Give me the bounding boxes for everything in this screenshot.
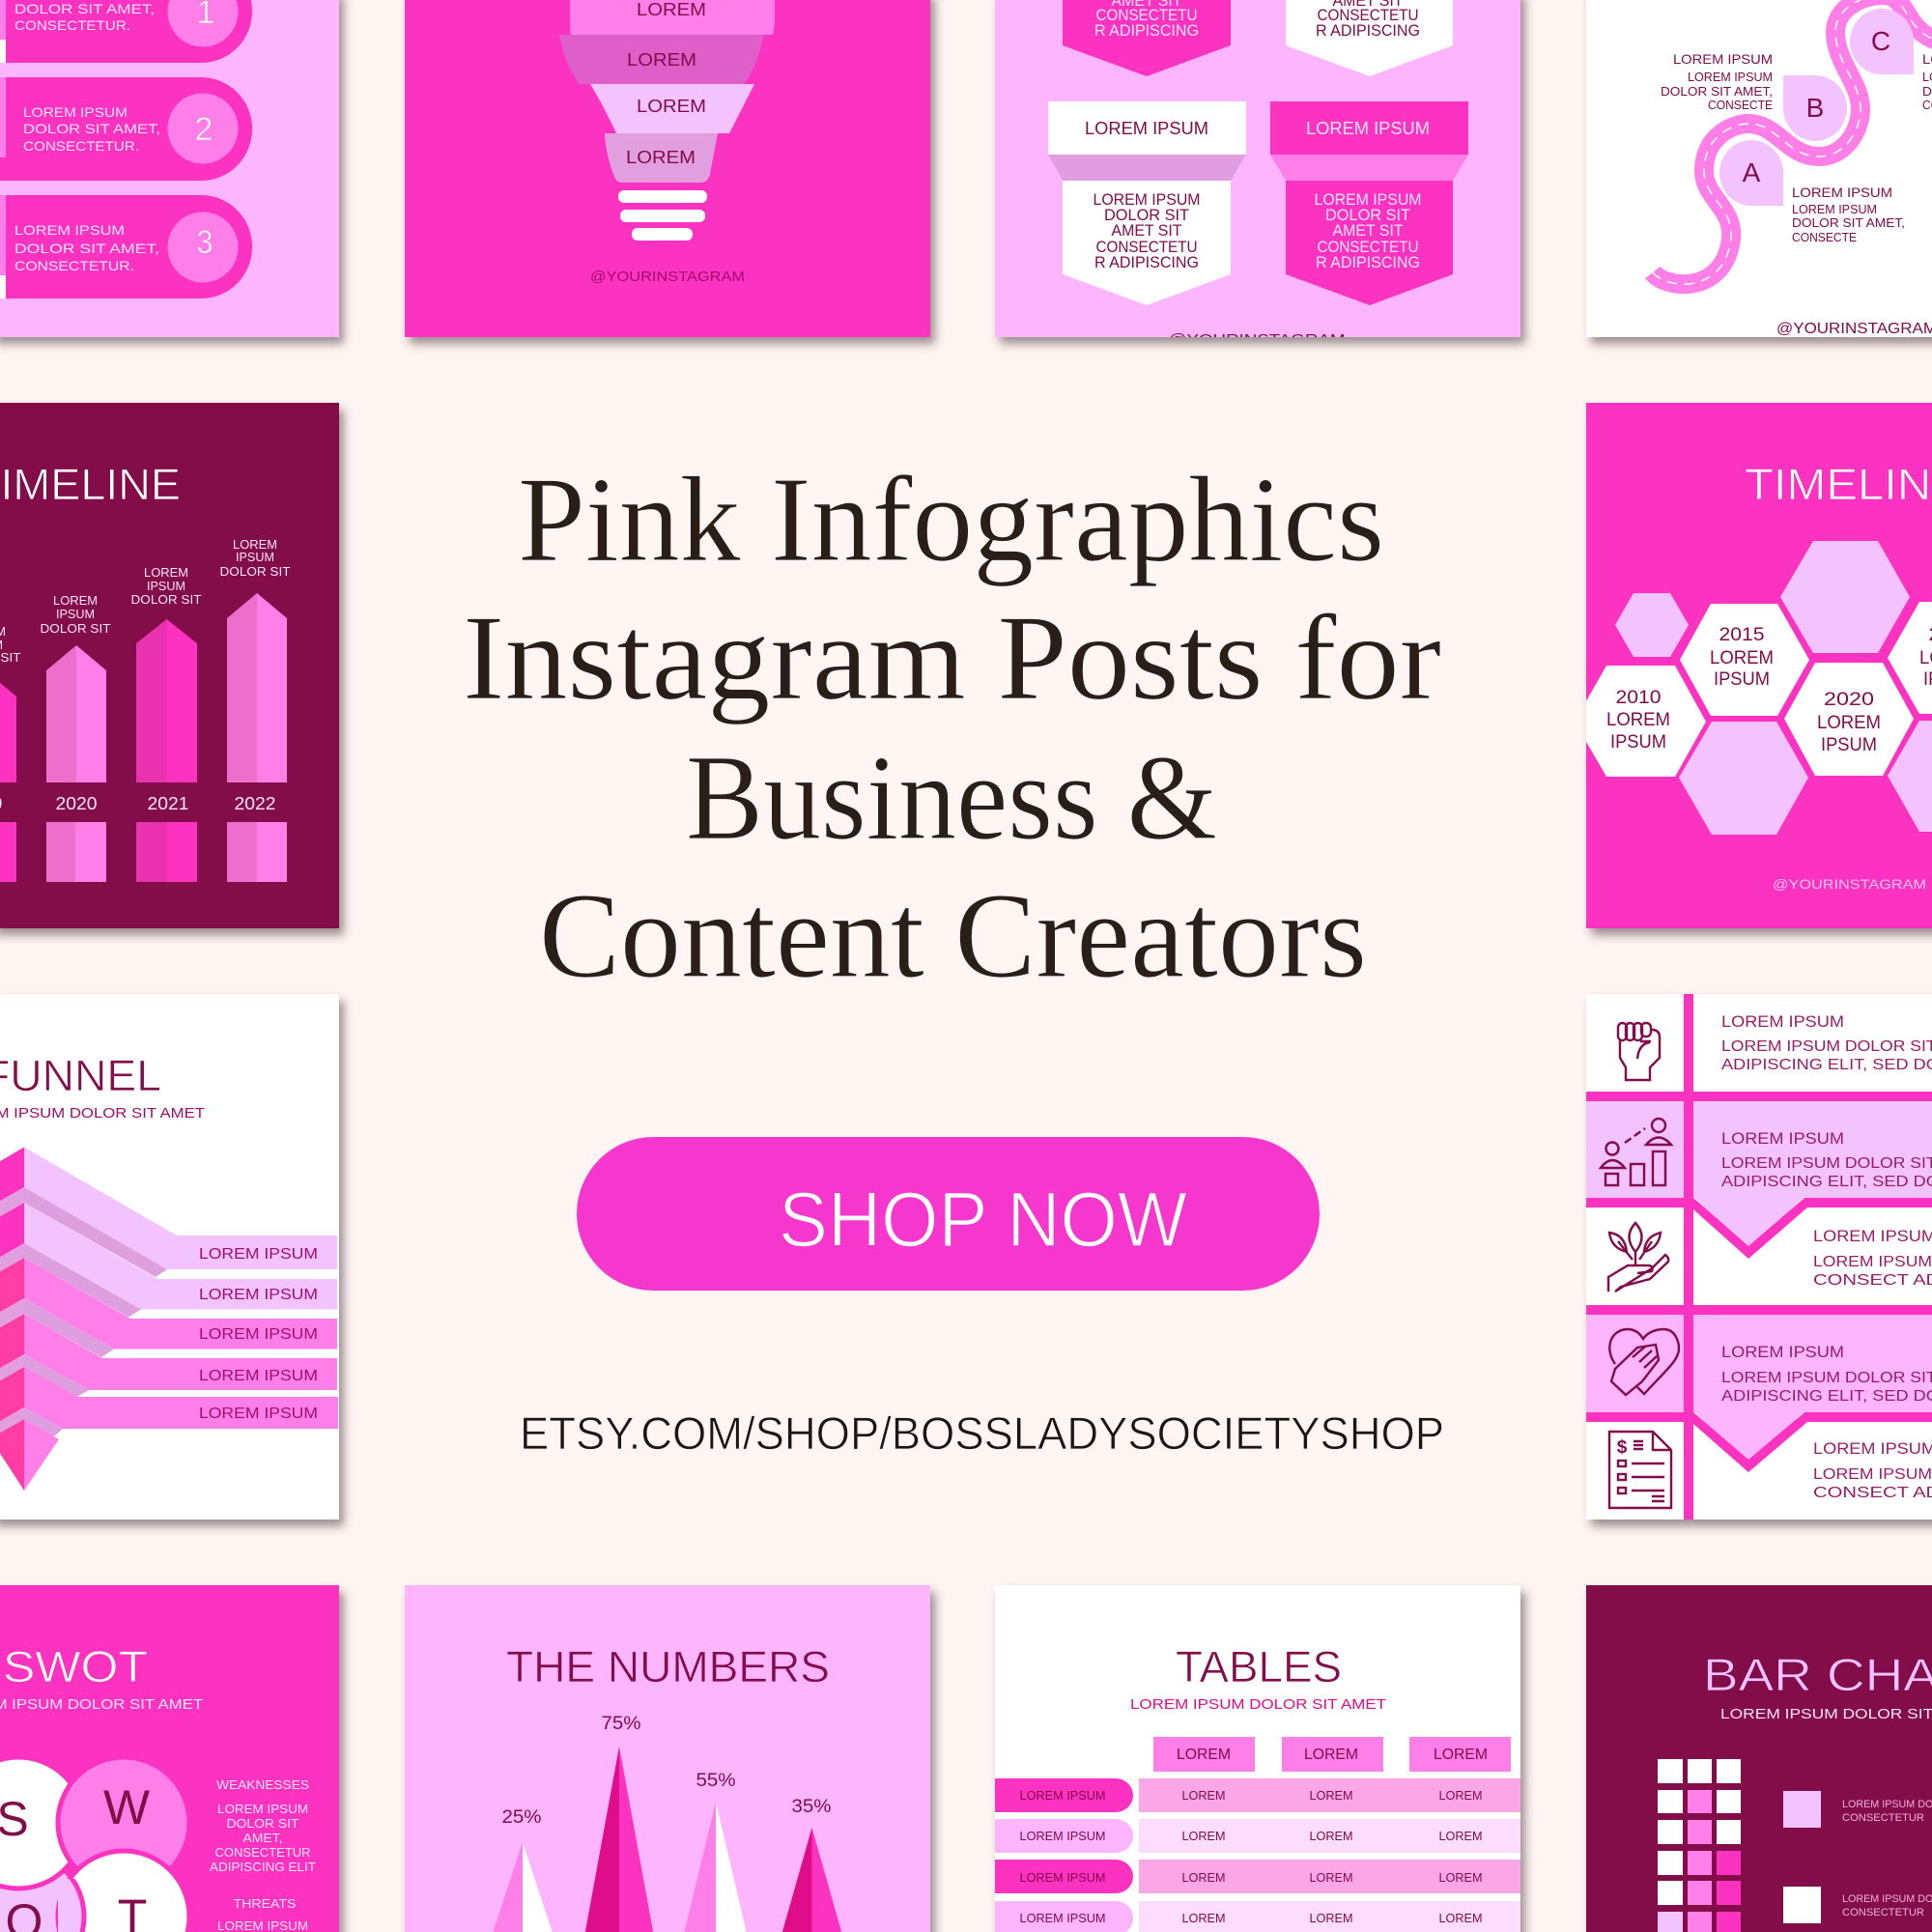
panel: SWOT card: WEAKNESSES — [216, 1777, 309, 1792]
heading: THE NUMBERS — [506, 1642, 830, 1691]
table: LOREM IPSUM — [1020, 1829, 1105, 1843]
panel: numbered list card: LOREM IPSUM — [23, 104, 128, 120]
panel: road roadmap card: C — [1871, 26, 1890, 56]
panel: numbered list card: DOLOR SIT AMET, — [23, 121, 160, 136]
panel: road roadmap card — [1586, 0, 1932, 337]
button: shop now: SHOP NOW — [779, 1177, 1188, 1264]
panel: arrow boxes card: AMET SIT — [1111, 221, 1182, 240]
panel: SWOT card: W — [103, 1780, 151, 1834]
panel: timeline bar card: IPSUM — [236, 550, 274, 564]
panel: funnel card — [0, 994, 339, 1520]
panel: arrow boxes card: LOREM IPSUM — [1094, 190, 1200, 209]
panel: icon list card: LOREM IPSUM — [1721, 1343, 1844, 1361]
panel: SWOT card: AMET, — [243, 1831, 282, 1845]
icon: light bulb: LOREM — [637, 0, 706, 19]
panel: timeline bar card: LOREM — [233, 537, 277, 552]
panel: arrow boxes card: LOREM IPSUM — [1085, 119, 1208, 138]
panel: SWOT card — [0, 1585, 339, 1932]
icon: heart and hand — [1609, 1329, 1679, 1395]
panel: road roadmap card: DOLOR SIT AMET, — [1661, 84, 1773, 99]
icon: light bulb: LOREM — [637, 97, 706, 116]
table — [995, 1737, 1520, 1932]
panel: arrow boxes card: CONSECTETU — [1095, 6, 1198, 24]
panel: icon list card: ADIPISCING ELIT, SED DO EI — [1721, 1174, 1932, 1190]
panel: road roadmap card: LOREM IPSUM — [1688, 70, 1773, 84]
panel: funnel card: LOREM IPSUM — [199, 1287, 318, 1303]
panel: funnel card: LOREM IPSUM — [199, 1326, 318, 1343]
title: Pink Infographics — [518, 453, 1384, 587]
panel: timeline bar card — [0, 403, 339, 928]
road — [1653, 0, 1932, 284]
panel: arrow boxes card: R ADIPISCING — [1316, 253, 1420, 271]
legend: CONSECTETUR — [1842, 1907, 1924, 1918]
panel: numbered list card: 2 — [195, 111, 213, 148]
panel: the numbers card: 55% — [696, 1771, 736, 1791]
panel: timeline bar card: IPSUM — [56, 607, 95, 621]
table: LOREM — [1439, 1829, 1482, 1843]
table: LOREM — [1439, 1788, 1482, 1803]
panel: icon list card: LOREM IPSUM — [1813, 1439, 1932, 1458]
panel: funnel card: LOREM IPSUM — [199, 1246, 318, 1263]
panel: icon list card: ADIPISCING ELIT, SED DO EI — [1721, 1057, 1932, 1073]
panel: the numbers card: 25% — [502, 1807, 542, 1828]
icon: hand with plant — [1608, 1223, 1668, 1292]
panel: hexagon timeline card: LOREM — [1817, 713, 1881, 733]
panel: road roadmap card: CONSECTE — [1792, 230, 1857, 244]
shop URL: ETSY.COM/SHOP/BOSSLADYSOCIETYSHOP — [520, 1407, 1444, 1459]
panel: SWOT card: DOLOR SIT — [226, 1816, 299, 1831]
icon: fist — [1618, 1023, 1660, 1080]
heading: SWOT — [3, 1642, 148, 1691]
panel: arrow boxes card: CONSECTETU — [1318, 238, 1418, 256]
panel: timeline bar card: DOLOR SIT — [131, 592, 202, 607]
panel: numbered list card: 3 — [197, 224, 213, 261]
panel: arrow boxes card: R ADIPISCING — [1316, 21, 1420, 40]
panel: hexagon timeline card: @YOURINSTAGRAM — [1773, 876, 1926, 892]
title: Business & — [686, 731, 1217, 866]
panel: hexagon timeline card: IPSUM — [1821, 735, 1877, 755]
title — [463, 453, 1441, 1004]
panel: arrow boxes card: R ADIPISCING — [1094, 21, 1199, 40]
funnel chart — [0, 1148, 338, 1491]
table: LOREM — [1182, 1870, 1225, 1885]
panel: timeline bar card: 2020 — [56, 794, 97, 813]
handle: @YOURINSTAGRAM — [590, 269, 745, 285]
button: shop now — [577, 1137, 1320, 1291]
panel: road roadmap card: B — [1806, 93, 1824, 123]
table: LOREM — [1310, 1788, 1352, 1803]
panel: numbered list card: CONSECTETUR. — [14, 258, 134, 273]
panel: timeline bar card: IPSUM — [147, 579, 185, 593]
panel: numbered list card: DOLOR SIT AMET, — [14, 241, 159, 256]
icon: light bulb: LOREM — [627, 50, 696, 70]
panel: arrow boxes card: R ADIPISCING — [1094, 253, 1199, 271]
table: LOREM — [1439, 1911, 1482, 1925]
panel: SWOT card: THREATS — [234, 1896, 297, 1911]
icon: light bulb — [559, 0, 775, 241]
hexagons — [1575, 541, 1932, 835]
panel: arrow boxes card — [995, 0, 1520, 348]
bar chart grid — [1658, 1759, 1741, 1932]
table: LOREM — [1439, 1870, 1482, 1885]
panel: hexagon timeline card: 2015 — [1719, 625, 1764, 645]
panel: hexagon timeline card: LOREM — [1710, 648, 1774, 668]
icon: growth chart — [1601, 1119, 1671, 1185]
panel: arrow boxes card: AMET SIT — [1333, 221, 1403, 240]
panel: funnel card: LOREM IPSUM — [199, 1368, 318, 1384]
table: LOREM — [1434, 1747, 1488, 1763]
icon: invoice document: $ — [1617, 1437, 1628, 1458]
panel: hexagon timeline card — [1575, 403, 1932, 928]
table: LOREM — [1310, 1911, 1352, 1925]
panel: hexagon timeline card: LOREM — [1606, 710, 1670, 730]
legend — [1783, 1791, 1932, 1923]
panel: numbered list card: CONSECTETUR. — [23, 138, 139, 154]
legend: CONSECTETUR — [1842, 1812, 1924, 1824]
panel: road roadmap card: A — [1743, 157, 1761, 187]
panel: hexagon timeline card: 2010 — [1615, 688, 1662, 708]
panel: numbered list card — [0, 0, 339, 337]
SWOT circles — [0, 1757, 189, 1932]
panel: hexagon timeline card: 2020 — [1824, 690, 1874, 710]
panel: SWOT card: CONSECTETUR — [214, 1845, 311, 1860]
panel: the numbers card: 75% — [601, 1714, 641, 1734]
table: LOREM — [1182, 1911, 1225, 1925]
table: LOREM IPSUM — [1020, 1870, 1105, 1885]
panel: numbered list card: DOLOR SIT AMET, — [14, 1, 155, 16]
panel: timeline bar card: LOREM — [144, 565, 188, 580]
icon: light bulb: LOREM — [626, 148, 696, 167]
panel: numbered list card: LOREM IPSUM — [14, 222, 125, 238]
title: Content Creators — [539, 869, 1367, 1004]
panel: timeline bar card: LOREM — [53, 593, 98, 608]
panel: road roadmap card: LOREM IPSUM — [1792, 202, 1877, 216]
panel: road roadmap card: LOREM IPSUM — [1673, 51, 1773, 67]
title: Instagram Posts for — [463, 591, 1441, 725]
panel: arrow boxes card: @YOURINSTAGRAM — [1169, 331, 1345, 348]
panel: hexagon timeline card: IPSUM — [1610, 732, 1666, 753]
panel: road roadmap card: @YOURINSTAGRAM — [1776, 321, 1932, 337]
panel: the numbers card — [405, 1585, 930, 1932]
panel: icon list card: LOREM IPSUM — [1721, 1012, 1844, 1031]
panel: light bulb card — [405, 0, 930, 337]
panel: the numbers card: 35% — [792, 1797, 832, 1817]
panel: road roadmap card: DOLOR SIT AMET, — [1792, 215, 1905, 230]
panel: numbered list card: CONSECTETUR. — [14, 17, 130, 33]
table: LOREM IPSUM — [1020, 1788, 1105, 1803]
panel: tables card — [995, 1585, 1520, 1932]
panel: SWOT card: ADIPISCING ELIT — [210, 1860, 316, 1874]
panel: timeline bar card: DOLOR SIT — [41, 621, 111, 636]
table: LOREM — [1177, 1747, 1231, 1763]
panel: road roadmap card: LOREM IPSUM — [1792, 185, 1892, 200]
panel: arrow boxes card: DOLOR SIT — [1104, 206, 1189, 224]
panel: arrow boxes card: LOREM IPSUM — [1306, 119, 1430, 138]
spike chart — [490, 1747, 844, 1932]
panel: arrow boxes card: CONSECTETU — [1095, 238, 1198, 256]
table: LOREM — [1182, 1829, 1225, 1843]
table: LOREM — [1304, 1747, 1358, 1763]
panel: funnel card: LOREM IPSUM — [199, 1406, 318, 1422]
panel: SWOT card: LOREM IPSUM — [217, 1802, 308, 1816]
panel: icon list card — [1586, 994, 1932, 1520]
panel: arrow boxes card: CONSECTETU — [1318, 6, 1418, 24]
panel: bar chart card — [1586, 1585, 1932, 1932]
icon: invoice document — [1609, 1432, 1671, 1508]
table: LOREM — [1182, 1788, 1225, 1803]
table: LOREM IPSUM — [1020, 1911, 1105, 1925]
panel: arrow boxes card: LOREM IPSUM — [1314, 190, 1422, 209]
heading: TABLES — [1176, 1642, 1342, 1691]
table: LOREM — [1310, 1870, 1352, 1885]
panel: timeline bar card: 2021 — [147, 794, 189, 813]
panel: icon list card: LOREM IPSUM — [1813, 1227, 1932, 1245]
panel: timeline bar card: 2022 — [234, 794, 276, 813]
panel: road roadmap card: CONSECTE — [1708, 98, 1773, 112]
panel: arrow boxes card: DOLOR SIT — [1325, 206, 1410, 224]
arrow chart — [0, 593, 287, 882]
panel: hexagon timeline card: IPSUM — [1714, 669, 1770, 690]
panel: icon list card: LOREM IPSUM — [1721, 1129, 1844, 1148]
panel: tables card: LOREM IPSUM DOLOR SIT AMET — [1130, 1696, 1386, 1713]
panel: timeline bar card: DOLOR SIT — [220, 564, 291, 579]
panel: icon list card: ADIPISCING ELIT, SED DO EI — [1721, 1388, 1932, 1405]
table: LOREM — [1310, 1829, 1352, 1843]
